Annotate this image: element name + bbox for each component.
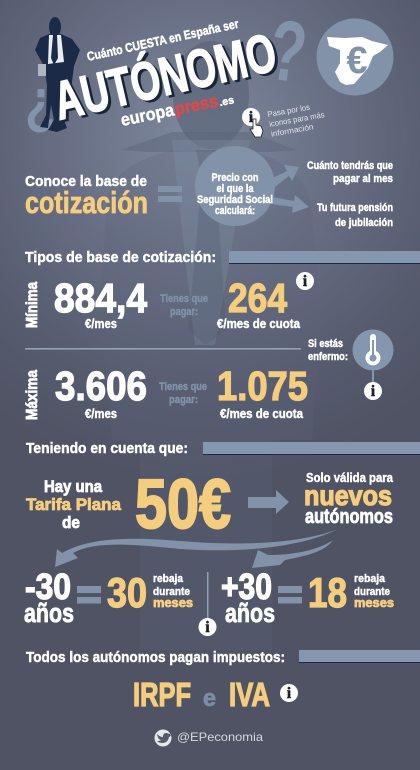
taxes: IRPF [133,676,191,713]
new self-employed: Solo válida para [306,471,394,485]
row: minima: Tienes que [160,293,208,305]
over 30 [221,566,394,628]
heading: conoce la base: cotización [25,185,148,220]
row: minima: 884,4 [54,275,147,321]
sick leave label: enfermo: [308,351,348,363]
title: AUTÓNOMO [48,22,282,132]
under 30: rebaja [153,573,184,585]
Spain map circle [316,18,394,96]
row: minima: 264 [228,275,287,321]
taxes: IVA [229,676,270,713]
over 30: años [225,598,275,628]
sick leave label: Si estás [308,338,343,350]
europapress logo [119,87,236,130]
arrow labels [307,160,393,229]
hint text: Pasa por los [267,103,311,119]
heading: todos los autonomos: Todos los autónomos pagan impuestos: [26,649,285,666]
decorative question marks: ? [263,2,312,102]
flat rate: de [62,514,80,532]
flat rate: 50€ [135,465,231,543]
twitter handle: @EPeconomia [177,730,263,744]
price circle [195,146,275,226]
equals sign [158,186,182,202]
row: maxima: €/mes [85,406,117,421]
row: maxima: Máxima [24,370,41,420]
arrow labels: pagar al mes [333,173,393,185]
row: maxima: 3.606 [55,363,147,409]
row: minima: Mínima [24,282,41,328]
europapress logo: press [173,91,220,119]
row: minima [24,275,301,331]
hint text: iconos para más [269,110,325,129]
row: minima: pagar: [170,306,198,318]
heading: teniendo en cuenta: Teniendo en cuenta que: [26,440,188,457]
Spain map circle: € [346,40,368,82]
taxes: e [203,685,216,712]
divider [25,348,301,350]
icon: info minima: i [303,273,308,290]
flat rate: Hay una [44,478,103,496]
under 30: -30 [25,566,71,607]
heading: conoce la base: Conoce la base de [25,174,147,190]
heading: conoce la base [25,174,148,220]
twitter handle [154,730,263,746]
decorative question marks: ¿ [25,67,55,136]
row: minima: €/mes de cuota [217,316,301,331]
row: maxima: Tienes que [159,381,207,393]
heading: tipos de base [25,249,420,266]
icon: thermometer with info [352,330,394,400]
arrow labels: Tu futura pensión [317,202,393,214]
row: minima: €/mes [85,316,117,331]
arrows from circle [268,165,309,213]
row: maxima [24,363,308,421]
icon: info taxes: i [287,685,292,702]
row: maxima: €/mes de cuota [220,406,304,421]
heading: teniendo en cuenta [26,440,420,457]
vertical divider with info: i [205,619,210,636]
hint text [267,100,327,139]
under 30: 30 [107,569,147,616]
info hint icon [242,108,263,137]
curved arrows [55,529,338,568]
info hint icon: i [249,109,254,126]
hint text: información [270,122,314,139]
over 30: meses [354,596,394,610]
sick leave label [308,338,348,363]
arrow labels: Cuánto tendrás que [307,160,393,172]
icon: info minima [296,272,314,290]
over 30: +30 [221,566,272,607]
heading: tipos de base: Tipos de base de cotización: [25,249,216,266]
vertical divider with info [198,572,216,636]
price circle: el que la [216,183,254,195]
over 30: durante [354,586,390,598]
under 30 [24,566,193,628]
under 30: años [24,598,74,628]
price circle: Seguridad Social [197,194,273,206]
small businessman figure [35,17,80,132]
price circle: calculará: [215,205,255,217]
flat rate: Tarifa Plana [26,496,122,514]
over 30: 18 [308,569,347,616]
title: AUTÓNOMO [51,24,285,134]
taxes [133,676,270,713]
title [48,17,285,134]
new self-employed: autónomos [305,506,393,528]
new self-employed [304,471,394,528]
row: maxima: 1.075 [217,363,308,409]
under 30: meses [153,596,193,610]
background silhouette of businessman [100,41,322,650]
arrow labels: de jubilación [335,217,393,229]
over 30: rebaja [354,573,386,585]
row: maxima: pagar: [169,394,198,406]
icon: info taxes [280,684,298,702]
title: Cuánto CUESTA en España ser [86,17,240,64]
europapress logo: .es [218,94,235,109]
icon: thermometer with info: i [371,383,376,400]
price circle: Precio con [212,172,259,184]
flat rate [26,465,231,543]
new self-employed: nuevos [304,480,392,511]
decorative question marks [25,2,312,136]
arrow right [248,490,289,514]
under 30: durante [153,586,190,598]
europapress logo: europa [119,100,176,130]
